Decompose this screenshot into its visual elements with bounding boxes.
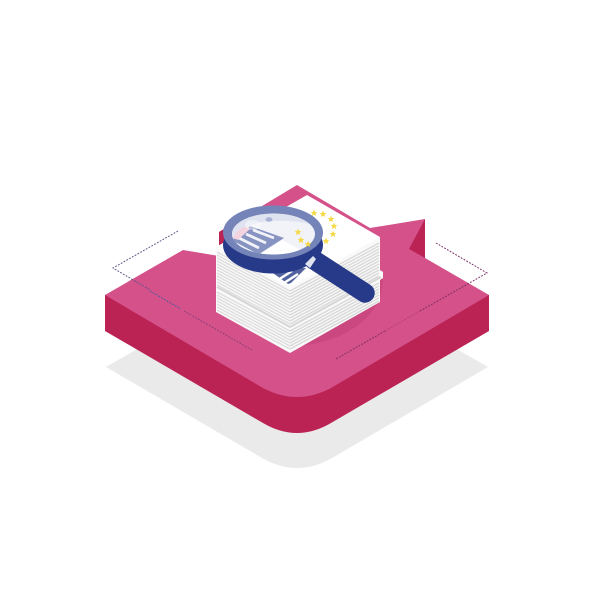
sheet edges left — [217, 252, 290, 349]
lens glare — [266, 217, 272, 222]
platform top — [105, 185, 489, 397]
stack body — [216, 237, 383, 353]
gold stars outside lens — [311, 210, 337, 244]
magnified form — [232, 214, 310, 254]
handle — [314, 260, 365, 293]
magnifying glass — [223, 206, 365, 293]
lens rim depth — [223, 216, 323, 274]
lens glass — [232, 214, 315, 254]
left fold — [219, 229, 224, 249]
dashed outline right — [336, 243, 487, 359]
paper stack — [216, 195, 383, 353]
illustration: document review on isometric arrow platform — [105, 185, 489, 468]
platform side — [105, 295, 489, 433]
stack shadow — [285, 262, 382, 347]
printed form on sheet — [266, 268, 306, 284]
lens ring — [223, 206, 323, 260]
handle collar — [305, 256, 316, 268]
stars seen through lens — [295, 229, 311, 247]
top sheet — [216, 195, 380, 287]
stack divider band — [217, 277, 381, 327]
ground shadow — [106, 313, 488, 468]
dashed outline left — [113, 231, 252, 350]
sheet edges right — [290, 243, 379, 349]
arrow fold — [409, 219, 425, 258]
reflection bubble — [245, 220, 261, 230]
